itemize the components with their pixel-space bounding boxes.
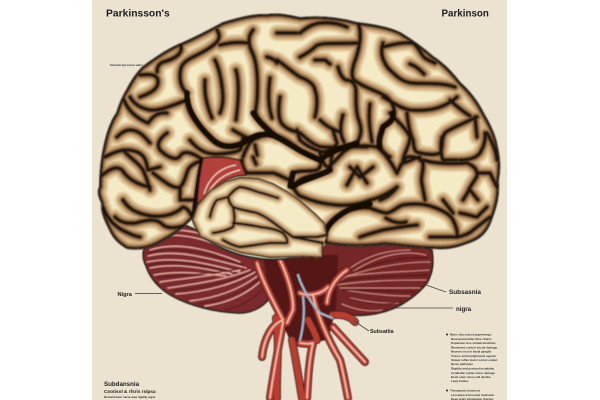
- cerebrum: [99, 14, 499, 259]
- label: nigra left: Nigra: [118, 292, 133, 298]
- left cerebellum: [143, 225, 282, 313]
- bullet list bottom right: [446, 332, 497, 400]
- caption bottom left: Cootisol & rfsris rslpsa: [104, 389, 156, 394]
- label: Subsatiia: [354, 321, 394, 335]
- bullet list bottom right: Lewy bodies: [451, 379, 469, 383]
- temporal lobe: [192, 177, 327, 258]
- bullet list bottom right: Motor disc tract dopaminergic: [450, 332, 492, 336]
- label: nigra right: [396, 306, 472, 313]
- caption bottom left: [104, 381, 156, 399]
- bullet list bottom right: Slower reflex motor cortex output: [451, 358, 497, 362]
- bullet list bottom right: Dopamine loss striatal dendrites: [451, 341, 496, 345]
- label: Subsasnia: [426, 285, 481, 296]
- bullet list bottom right: Brain stem nerve cell decline: [451, 375, 491, 379]
- label: top left callout: Substantia nigra neurons area: [110, 63, 140, 67]
- background panel: [92, 0, 507, 400]
- bullet list bottom right: Levodopa and neural treatment: [451, 393, 494, 397]
- insula: [197, 157, 246, 204]
- bullet list bottom right: Rigidity and postural instability: [451, 366, 494, 370]
- label: Subsatiia: Subsatiia: [370, 329, 394, 335]
- label: nigra right: nigra: [456, 306, 472, 313]
- label: Subsasnia: Subsasnia: [449, 289, 481, 296]
- label: nigra left: [118, 292, 162, 298]
- bullet list bottom right: Movement control circuit damage: [451, 345, 497, 349]
- blue nerve: [298, 275, 332, 340]
- right cerebellum: [318, 235, 433, 315]
- caption bottom left: Subdansnia: [104, 381, 140, 388]
- heading: Parkinson: Parkinson: [442, 8, 489, 20]
- bullet list bottom right: Neurons lost in basal ganglia: [451, 350, 492, 354]
- bullet list bottom right: Therapeutic functions: [450, 388, 481, 392]
- bullet list bottom right: Tremor and bradykinesia signals: [451, 354, 496, 358]
- brainstem and nerves: [257, 255, 365, 398]
- caption bottom left: Dorsal tremor nerve area rigidity signs: [104, 395, 156, 399]
- bullet list bottom right: Nerve pathways: [451, 362, 473, 366]
- bullet list bottom right: Cerebellar nuclei motor damage: [451, 371, 495, 375]
- heading: Parkinsson's: Parkinsson's: [106, 8, 170, 20]
- bullet list bottom right: Neurotransmitter fibre chains: [451, 337, 492, 341]
